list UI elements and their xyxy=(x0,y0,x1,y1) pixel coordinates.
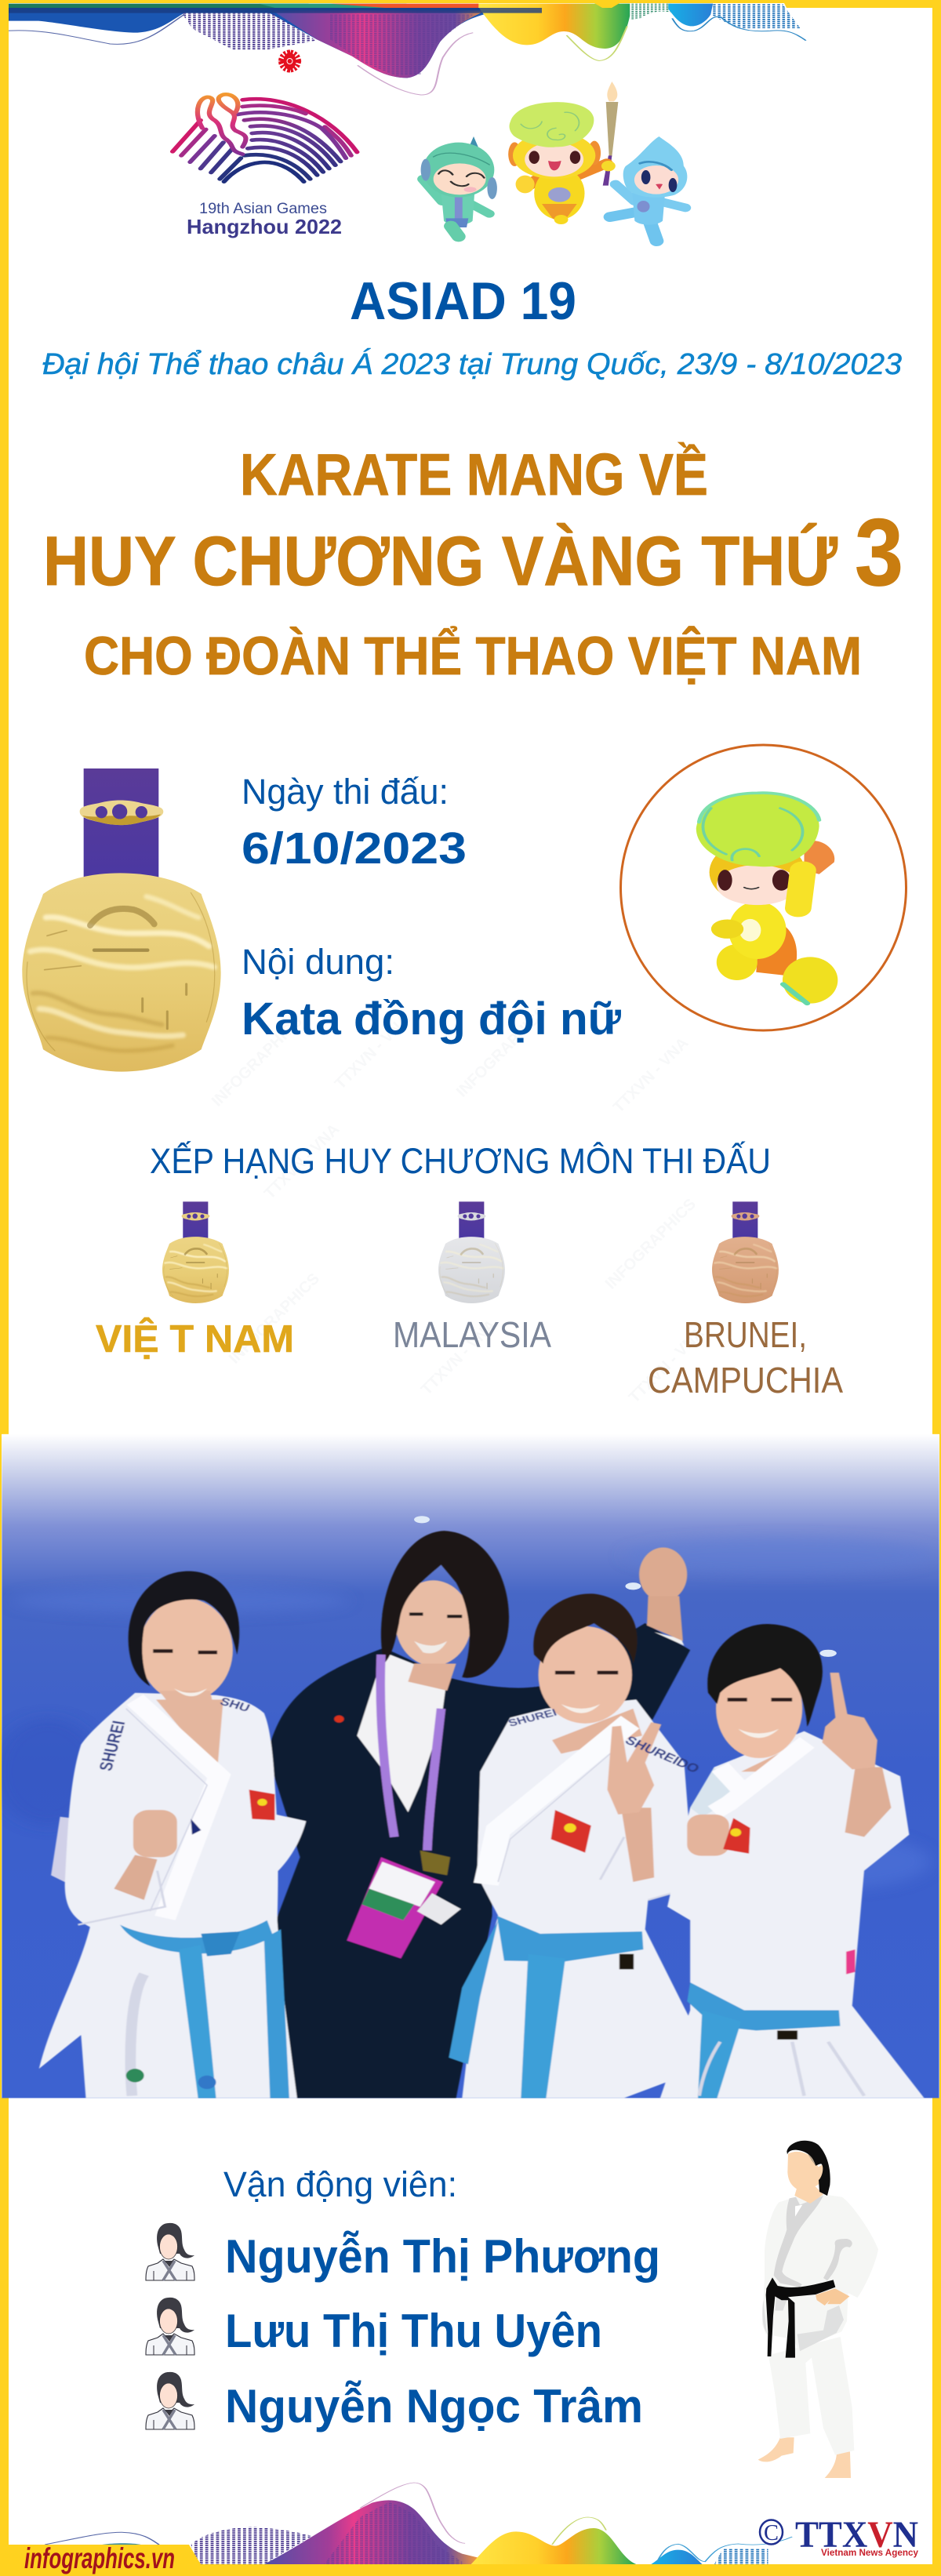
title: 3 xyxy=(855,499,903,605)
athlete 3 xyxy=(146,2372,643,2432)
icon: bronze medal xyxy=(712,1201,779,1303)
watermarks: INFOGRAPHICS xyxy=(453,1004,550,1101)
watermarks: INFOGRAPHICS xyxy=(209,1013,306,1110)
icon: gold medal xyxy=(162,1201,229,1303)
ranking: bronze Brunei, Cambodia xyxy=(648,1201,843,1401)
person: athlete left xyxy=(39,1571,306,2098)
wordmark: TTXVN xyxy=(795,2514,918,2556)
icon: copyright xyxy=(760,2520,783,2545)
bottom decorative wave strip xyxy=(45,2483,792,2564)
website label: infographics.vn xyxy=(24,2542,175,2574)
name: Nguyễn Ngọc Trâm xyxy=(225,2380,643,2432)
label: CAMPUCHIA xyxy=(648,1360,843,1401)
icon: copyright: C xyxy=(764,2521,779,2545)
tagline: Vietnam News Agency xyxy=(821,2547,918,2558)
label xyxy=(648,1314,843,1401)
ranking: gold Vietnam xyxy=(96,1201,294,1361)
watermarks: TTXVN - VNA xyxy=(261,1121,343,1203)
match date: 6/10/2023 xyxy=(242,823,467,874)
athlete 1 xyxy=(146,2223,660,2283)
watermarks: TTXVN - VNA xyxy=(610,1034,692,1117)
heading: ASIAD 19: ASIAD 19 xyxy=(350,271,576,331)
top yellow band xyxy=(0,0,941,8)
icon: athlete avatar xyxy=(146,2372,194,2429)
title: CHO ĐOÀN THỂ THAO VIỆT NAM xyxy=(84,626,862,686)
icon: large gold medal xyxy=(22,768,221,1072)
watermarks: INFOGRAPHICS xyxy=(602,1196,699,1293)
person: athlete left: SHU xyxy=(218,1695,252,1714)
Hangzhou 2022 Asian Games logo xyxy=(173,94,357,238)
match date xyxy=(242,772,467,874)
person: athlete right xyxy=(660,1624,925,2098)
label: MALAYSIA xyxy=(393,1314,551,1355)
person: athlete centre-right: SHUREIDO xyxy=(623,1733,703,1775)
icon: red sun emblem xyxy=(278,49,302,74)
Hangzhou 2022 Asian Games logo: 19th Asian Games xyxy=(199,201,327,217)
heading: medal ranking: XẾP HẠNG HUY CHƯƠNG MÔN THI ĐẤU xyxy=(150,1141,771,1181)
label: BRUNEI, xyxy=(684,1314,807,1355)
label: VIỆ T NAM xyxy=(96,1317,294,1361)
event: Kata đồng đội nữ xyxy=(242,994,621,1045)
mascot: blue xyxy=(610,136,687,241)
mascots trio xyxy=(421,82,687,241)
watermarks: TTXVN - VNA xyxy=(332,1011,413,1093)
bottom yellow band and tab xyxy=(0,2545,941,2576)
person: athlete centre-right xyxy=(449,1593,703,2098)
right yellow frame xyxy=(932,0,941,2576)
title: KARATE MANG VỀ xyxy=(240,441,708,507)
watermarks: TTXVN - VNA xyxy=(418,1317,500,1399)
icon: silver medal xyxy=(438,1201,505,1303)
event xyxy=(242,942,621,1045)
icon: athlete avatar xyxy=(146,2298,194,2355)
athletes heading: Vận động viên: xyxy=(223,2164,457,2204)
title: HUY CHƯƠNG VÀNG THỨ xyxy=(43,521,837,600)
name: Lưu Thị Thu Uyên xyxy=(225,2305,602,2357)
title xyxy=(43,441,903,686)
left yellow frame xyxy=(0,0,9,2576)
ranking: silver Malaysia xyxy=(393,1201,551,1355)
person: athlete centre-right: SHUREI xyxy=(507,1707,558,1729)
athlete 2 xyxy=(146,2298,602,2357)
top decorative wave banner xyxy=(0,4,806,95)
watermarks: TTXVN - VNA xyxy=(626,1324,707,1407)
name: Nguyễn Thị Phương xyxy=(225,2230,660,2283)
person: athlete left: SHUREI xyxy=(96,1720,129,1772)
team photo xyxy=(0,1434,939,2098)
Hangzhou 2022 Asian Games logo: Hangzhou 2022 xyxy=(187,215,342,238)
mascot: yellow with torch xyxy=(508,82,618,224)
event: Nội dung: xyxy=(242,942,394,982)
mascot in circle xyxy=(621,745,906,1030)
TTXVN logo xyxy=(760,2514,918,2558)
match date: Ngày thi đấu: xyxy=(242,772,449,812)
karate figure with black belt xyxy=(758,2141,878,2478)
watermarks: INFOGRAPHICS xyxy=(226,1270,323,1368)
icon: athlete avatar xyxy=(146,2223,194,2280)
subtitle: Đại hội Thể thao châu Á 2023 tại Trung Quốc, 23/9 - 8/10/2023 xyxy=(42,347,902,381)
watermarks xyxy=(209,1004,707,1407)
mascot: green xyxy=(421,136,497,237)
person: coach in dark suit xyxy=(267,1531,690,2098)
